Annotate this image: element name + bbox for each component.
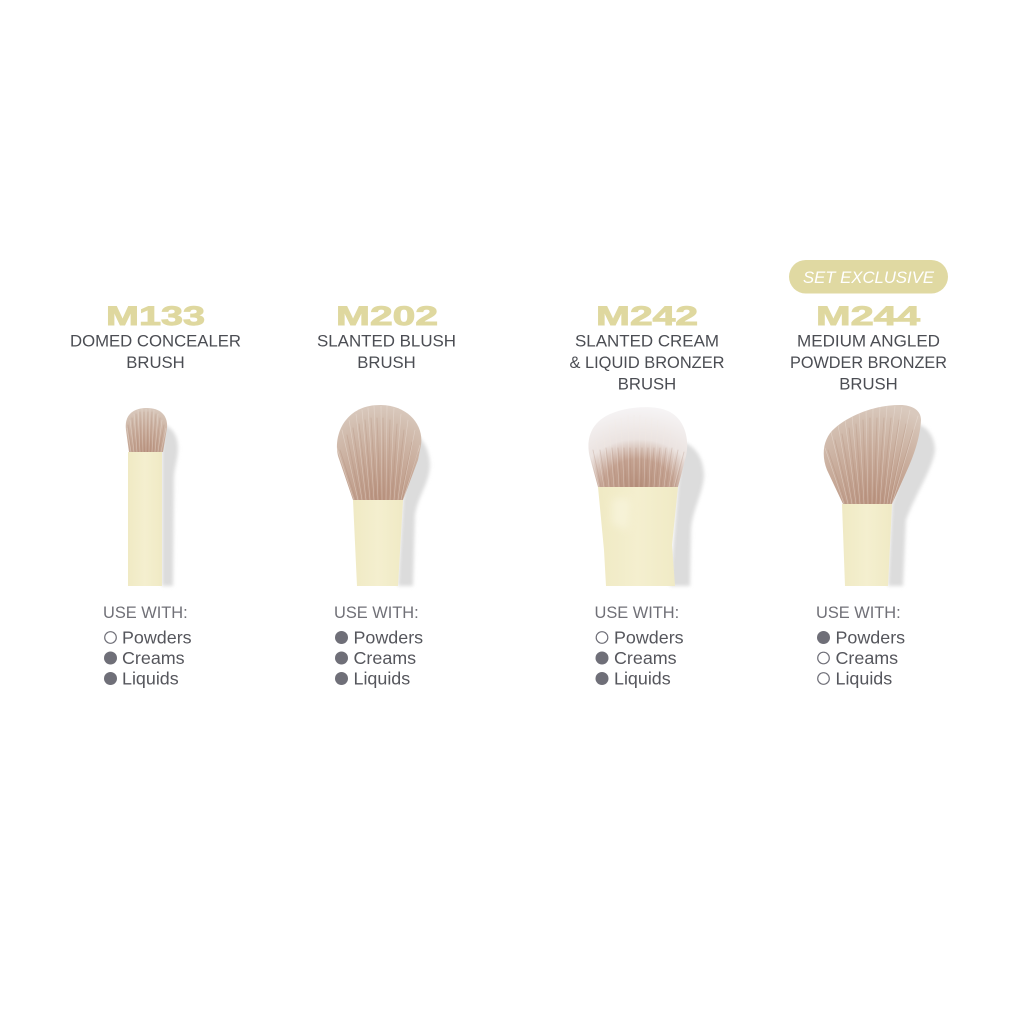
use with list M133: Liquids: [122, 668, 179, 688]
column: M133 domed concealer brush: [70, 301, 241, 688]
set exclusive badge: SET EXCLUSIVE: [803, 268, 935, 287]
use with list M133: USE WITH:: [103, 604, 188, 622]
use with list M202: Creams: [354, 648, 416, 668]
column: M202 slanted blush brush: [317, 301, 456, 688]
brush name M202: BRUSH: [357, 353, 416, 372]
use with list M202: Liquids: [354, 668, 410, 688]
use with list M202: Powders: [354, 628, 423, 648]
brush name M242: SLANTED CREAM: [575, 332, 719, 350]
brush code M133: M133: [106, 301, 205, 331]
brush name M242: & LIQUID BRONZER: [570, 353, 724, 372]
brush image M133: [126, 408, 178, 586]
use with list M242: Liquids: [614, 668, 671, 688]
use with list M133: [103, 604, 192, 688]
brush name M244: MEDIUM ANGLED: [797, 332, 940, 350]
brush image M242: [588, 407, 704, 586]
use with list M244: [816, 604, 905, 688]
use with list M202: USE WITH:: [334, 604, 419, 622]
use with list M242: [594, 604, 684, 688]
set exclusive badge: [789, 260, 948, 294]
column: M244 medium angled powder bronzer brush: [789, 260, 948, 688]
brush name M244: POWDER BRONZER: [790, 353, 947, 372]
brush name M242: BRUSH: [618, 374, 676, 394]
brush code M244: M244: [816, 301, 920, 331]
brush image M244: [824, 405, 935, 586]
brush code M202: M202: [336, 301, 438, 331]
use with list M244: Liquids: [836, 668, 892, 688]
use with list M133: Creams: [122, 648, 185, 668]
brush code M242: M242: [596, 301, 698, 331]
brush name M244: BRUSH: [839, 374, 898, 394]
use with list M242: Creams: [614, 648, 677, 668]
use with list M202: [334, 604, 423, 688]
use with list M242: Powders: [614, 628, 684, 648]
brush image M202: [336, 405, 430, 586]
column: M242 slanted cream and liquid bronzer brush: [570, 301, 724, 688]
use with list M244: Creams: [836, 648, 898, 668]
use with list M244: Powders: [836, 628, 905, 648]
brush name M133: DOMED CONCEALER: [70, 332, 241, 350]
use with list M133: Powders: [122, 628, 192, 648]
use with list M244: USE WITH:: [816, 604, 901, 622]
use with list M242: USE WITH:: [594, 604, 679, 622]
brush name M133: BRUSH: [126, 353, 185, 372]
brush name M202: SLANTED BLUSH: [317, 332, 456, 350]
